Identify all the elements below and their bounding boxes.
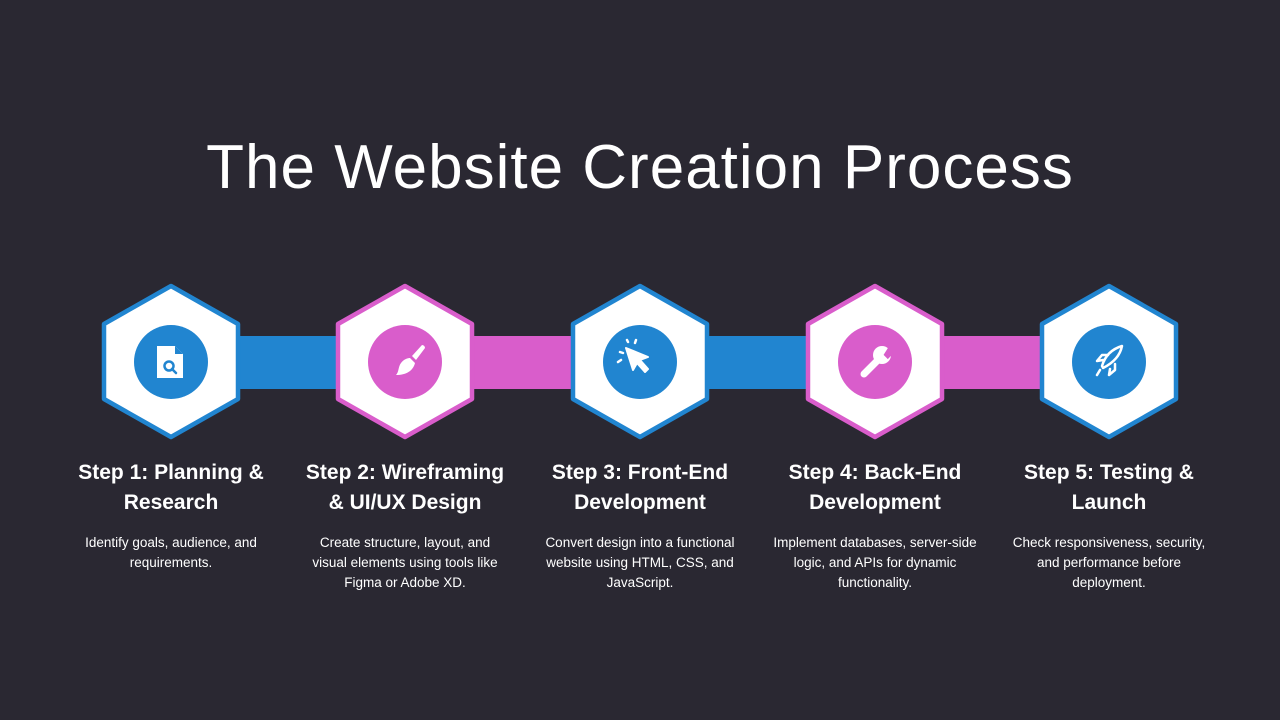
step 4 hexagon: [808, 286, 942, 437]
step 2 text: [306, 461, 504, 590]
step 4 text: [773, 461, 977, 590]
step 2 text: visual elements using tools like: [312, 555, 498, 570]
icon: rocket: [1097, 346, 1122, 375]
icon: brush: [396, 345, 425, 375]
step 1 text: Research: [124, 491, 218, 514]
step 3 text: Step 3: Front-End: [552, 461, 728, 484]
step 1 text: requirements.: [130, 555, 212, 570]
step 1 text: Identify goals, audience, and: [85, 535, 257, 550]
step 1 text: [78, 461, 264, 570]
step 3 text: website using HTML, CSS, and: [545, 555, 734, 570]
step 1 text: Step 1: Planning &: [78, 461, 264, 484]
step 3 hexagon: [573, 286, 707, 437]
step 1 hexagon: [104, 286, 238, 437]
step 5 text: Check responsiveness, security,: [1013, 535, 1205, 550]
step 5 text: and performance before: [1037, 555, 1181, 570]
step 2 text: Figma or Adobe XD.: [344, 575, 466, 590]
icon: wrench: [864, 346, 894, 374]
step 4 text: Development: [809, 491, 941, 514]
title: The Website Creation Process: [206, 133, 1074, 202]
step 5 text: Launch: [1072, 491, 1146, 514]
step 5 text: deployment.: [1072, 575, 1146, 590]
step 3 text: JavaScript.: [607, 575, 673, 590]
step 3 text: Convert design into a functional: [545, 535, 735, 550]
connector bars: [171, 336, 1109, 389]
icon: document search: [157, 346, 183, 378]
step 4 text: functionality.: [838, 575, 912, 590]
step 2 text: Step 2: Wireframing: [306, 461, 504, 484]
step 5 text: Step 5: Testing &: [1024, 461, 1194, 484]
step 4 text: logic, and APIs for dynamic: [794, 555, 957, 570]
icon: cursor click: [618, 340, 648, 372]
step 3 text: [545, 461, 735, 590]
step 2 hexagon: [338, 286, 472, 437]
step 4 text: Implement databases, server-side: [773, 535, 977, 550]
step 2 text: & UI/UX Design: [329, 491, 481, 514]
step 2 text: Create structure, layout, and: [320, 535, 490, 550]
step 5 hexagon: [1042, 286, 1176, 437]
step 3 text: Development: [574, 491, 706, 514]
step 5 text: [1013, 461, 1205, 590]
step 4 text: Step 4: Back-End: [789, 461, 961, 484]
